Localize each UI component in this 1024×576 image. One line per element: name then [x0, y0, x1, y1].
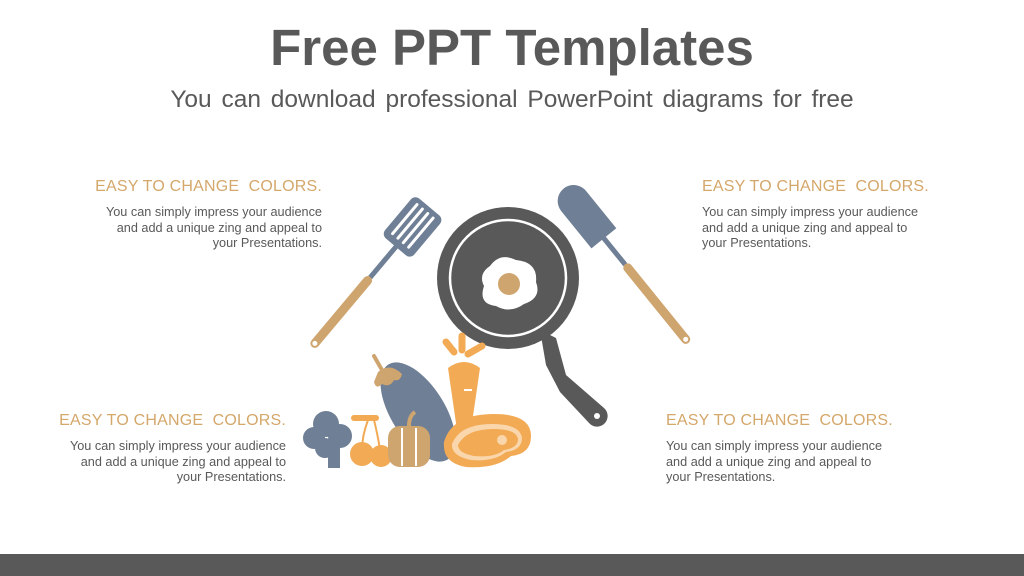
text block: bottom left: and add a unique zing and appeal to [81, 454, 286, 468]
text block: top right [702, 178, 929, 250]
text block: bottom right: EASY TO CHANGE COLORS. [666, 412, 893, 429]
text block: top right: EASY TO CHANGE COLORS. [702, 178, 929, 195]
text block: top left: You can simply impress your audience [106, 205, 322, 219]
title: Free PPT Templates [270, 19, 754, 76]
text block: bottom right: You can simply impress your audience [666, 439, 882, 453]
text block: bottom left [59, 412, 286, 484]
subtitle: You can download professional PowerPoint diagrams for free [170, 86, 854, 113]
icon: slotted spatula [299, 195, 444, 358]
text block: top right: your Presentations. [702, 236, 811, 250]
text block: bottom right: and add a unique zing and appeal to [666, 454, 871, 468]
text block: bottom left: your Presentations. [177, 470, 286, 484]
text block: top right: and add a unique zing and appeal to [702, 220, 907, 234]
text block: bottom left: EASY TO CHANGE COLORS. [59, 412, 286, 429]
footer bar [0, 554, 1024, 576]
icon: frying pan with egg [437, 207, 608, 427]
text block: top right: You can simply impress your audience [702, 205, 918, 219]
icon: vegetables and meat [303, 336, 531, 474]
text block: top left [95, 178, 322, 250]
icon: rubber spatula [551, 179, 700, 351]
text block: top left: EASY TO CHANGE COLORS. [95, 178, 322, 195]
text block: bottom left: You can simply impress your audience [70, 439, 286, 453]
text block: top left: and add a unique zing and appeal to [117, 220, 322, 234]
text block: bottom right [666, 412, 893, 484]
text block: top left: your Presentations. [213, 236, 322, 250]
text block: bottom right: your Presentations. [666, 470, 775, 484]
